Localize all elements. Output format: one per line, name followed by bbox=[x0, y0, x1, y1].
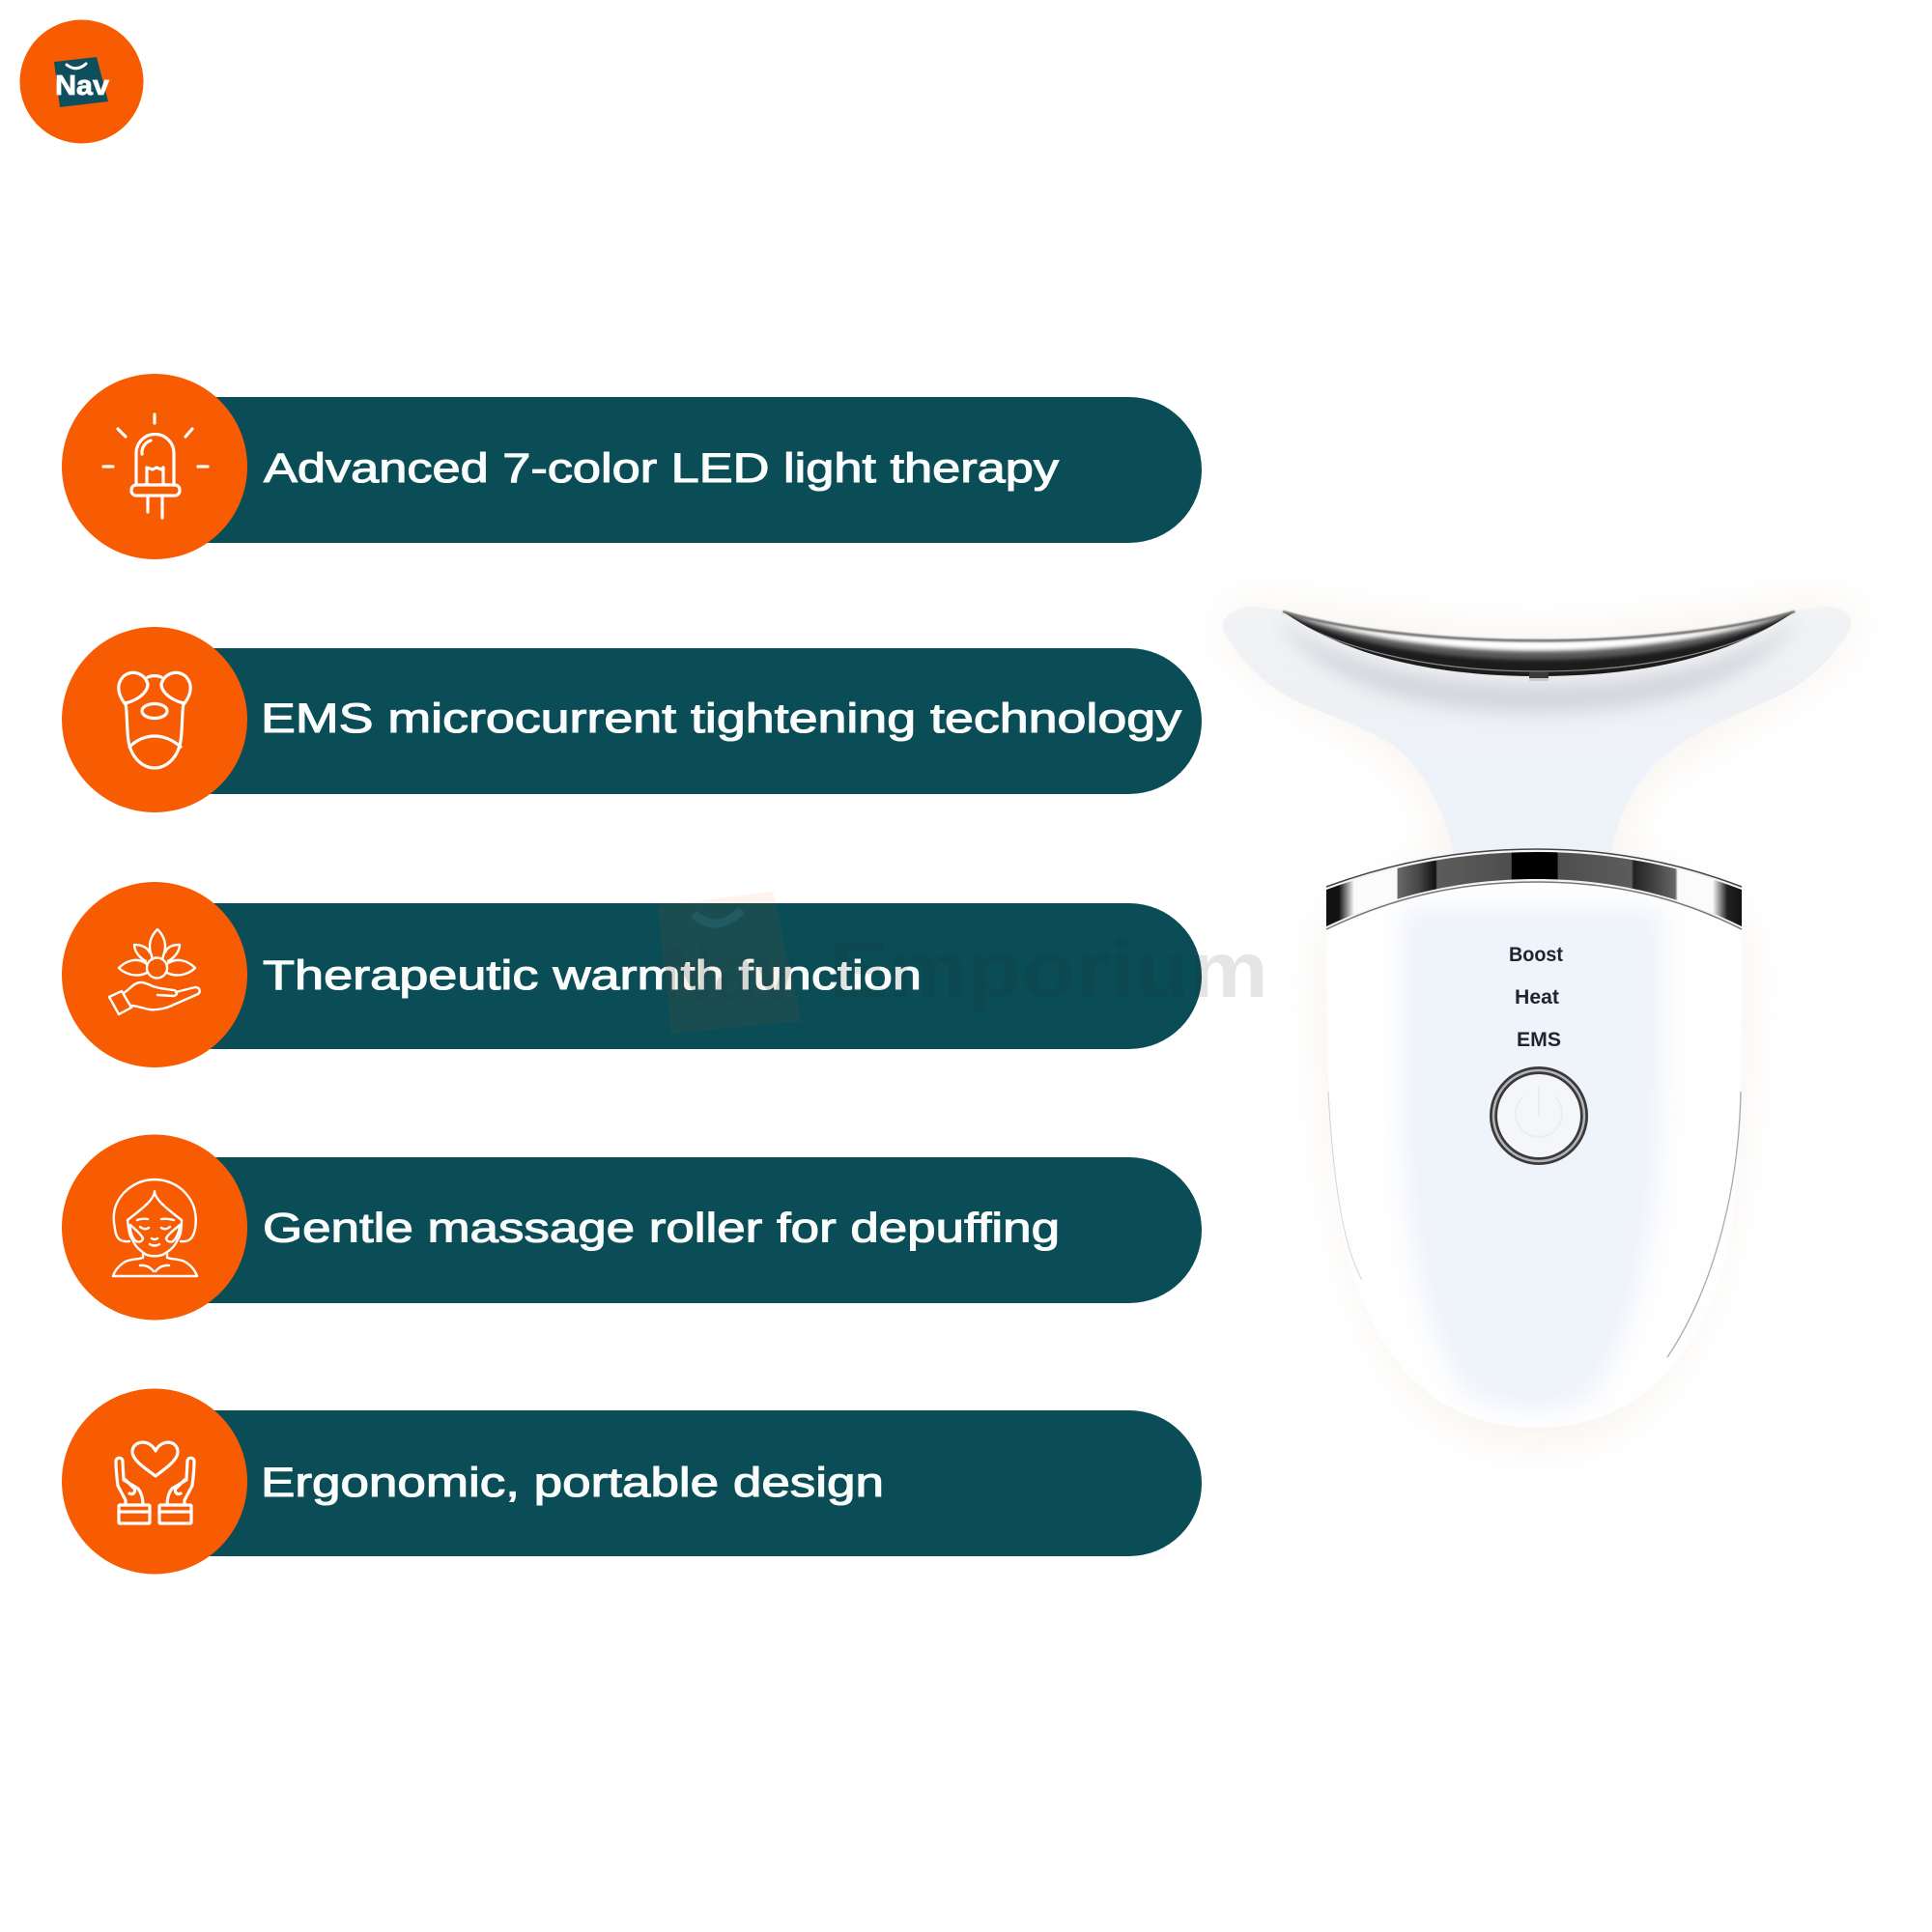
pill: EMS bbox=[155, 648, 1202, 794]
text: LED light therapy: Advanced 7-color LED light therapy bbox=[264, 445, 1060, 492]
icon: lotus over hand bbox=[62, 882, 247, 1067]
icon: hands holding heart bbox=[62, 1389, 247, 1575]
body left edge bbox=[1328, 1092, 1362, 1280]
feature row 2: EMS bbox=[62, 627, 1202, 812]
icon: face mask bbox=[62, 627, 247, 812]
device head bbox=[1223, 607, 1851, 855]
feature row 3: warmth bbox=[62, 882, 1202, 1067]
watermark: Nav Emporium: Emporium bbox=[829, 926, 1268, 1014]
body inner panel bbox=[1403, 908, 1662, 1410]
pill: LED light therapy bbox=[155, 397, 1202, 543]
text: EMS: EMS microcurrent tightening technology bbox=[261, 696, 1182, 742]
label: Boost: Boost bbox=[1509, 944, 1563, 966]
pill: massage bbox=[155, 1157, 1202, 1303]
text: massage: Gentle massage roller for depuffing bbox=[263, 1206, 1060, 1252]
device body bbox=[1326, 874, 1742, 1428]
logo: Nav badge bbox=[19, 19, 143, 143]
text: warmth: Therapeutic warmth function bbox=[263, 952, 922, 999]
icon: LED bulb bbox=[62, 374, 247, 559]
pill: warmth bbox=[155, 903, 1202, 1049]
product: neck massager device bbox=[1223, 607, 1854, 1439]
label: Heat: Heat bbox=[1515, 986, 1559, 1009]
metal blade bbox=[1283, 611, 1795, 681]
watermark: Nav Emporium: Nav bbox=[661, 928, 796, 1016]
power button bbox=[1493, 1070, 1584, 1161]
body right edge bbox=[1667, 1092, 1741, 1357]
text: ergonomic: Ergonomic, portable design bbox=[261, 1460, 884, 1506]
chrome collar bbox=[1326, 849, 1742, 929]
feature row 4: massage roller bbox=[62, 1134, 1202, 1320]
watermark: Nav Emporium bbox=[658, 892, 1268, 1034]
feature row 1: LED light therapy bbox=[62, 374, 1202, 559]
head shadow band under blade bbox=[1289, 630, 1788, 717]
pill: ergonomic bbox=[155, 1410, 1202, 1556]
label: EMS: EMS bbox=[1517, 1029, 1561, 1051]
icon: woman with face massage bbox=[62, 1134, 247, 1320]
device glow bbox=[1223, 607, 1854, 1439]
feature row 5: ergonomic bbox=[62, 1389, 1202, 1575]
logo: Nav badge: Nav bbox=[55, 71, 109, 101]
